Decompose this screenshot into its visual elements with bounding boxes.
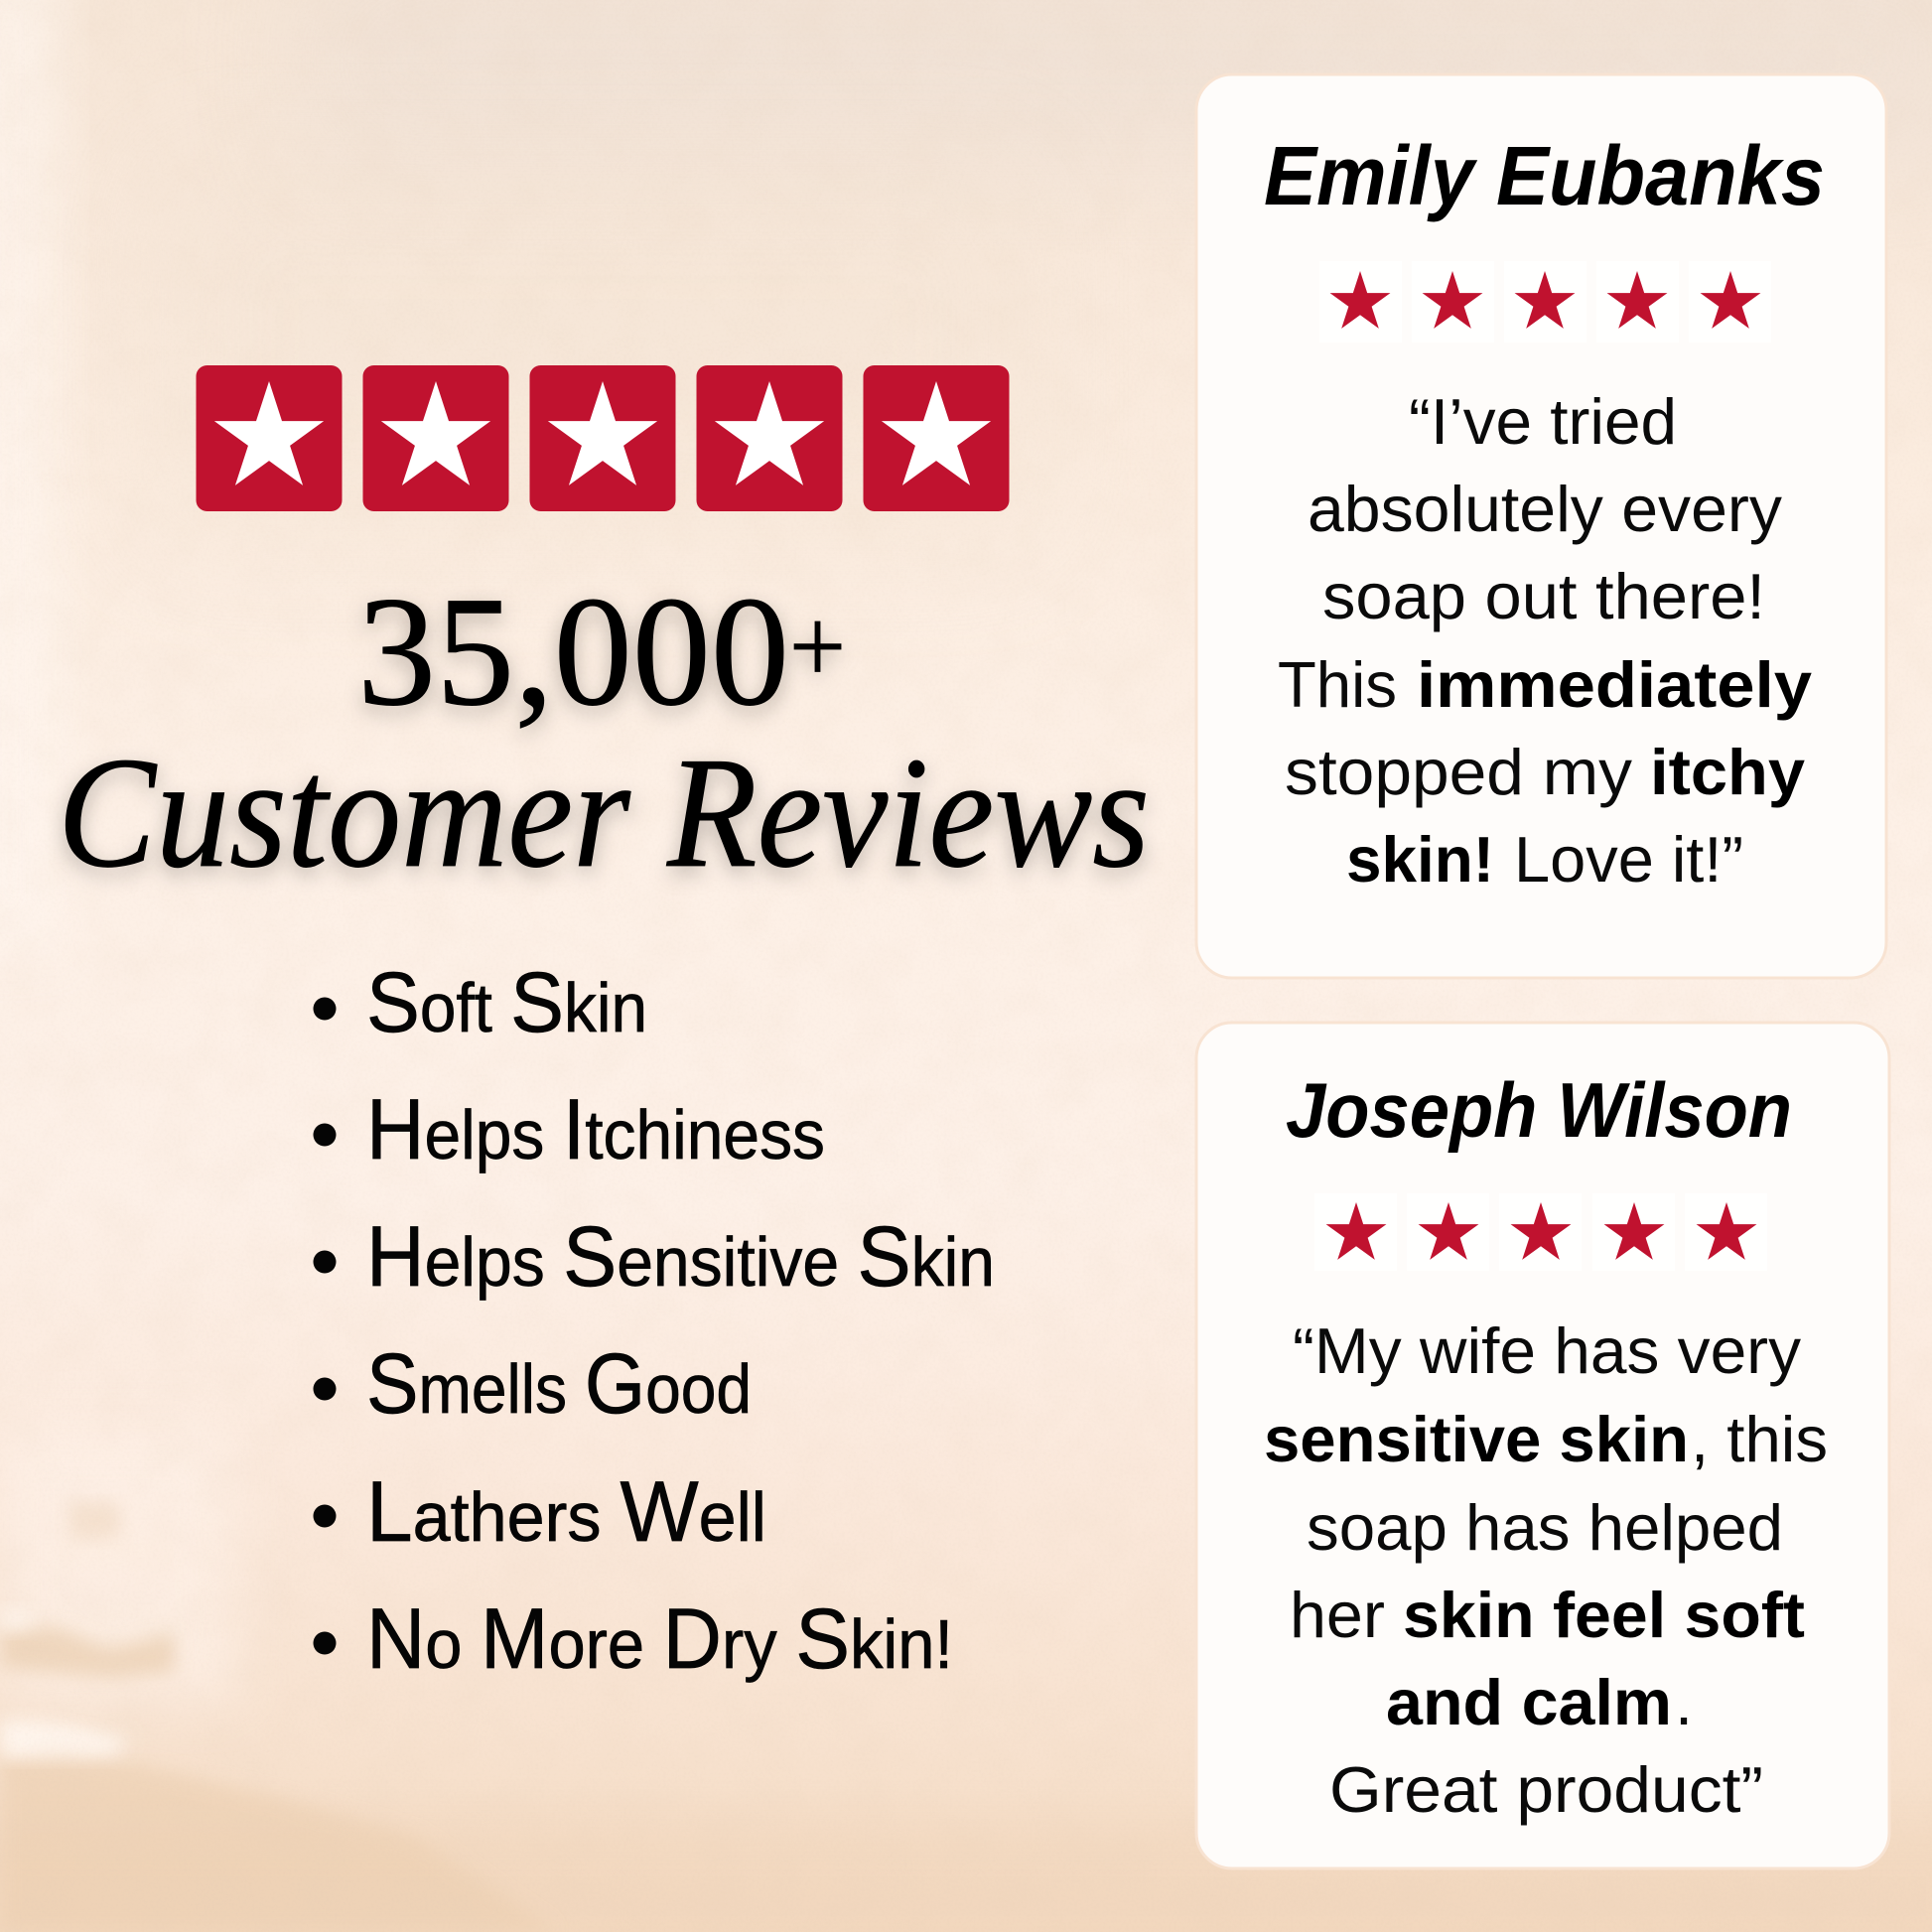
review quote text: “My wife has very — [1293, 1314, 1802, 1387]
panel: review by Emily Eubanks — [1196, 74, 1886, 978]
review quote text: Great product” — [1329, 1753, 1763, 1826]
headline: 35,000+ Customer Reviews: + — [789, 588, 846, 706]
benefits bullet list: No More Dry Skin! — [366, 1591, 953, 1687]
five red stars on white tiles — [1314, 1193, 1767, 1271]
review quote text: immediately — [1417, 648, 1812, 721]
review quote text: sensitive skin — [1264, 1403, 1689, 1475]
benefits bullet list: Helps Sensitive Skin — [366, 1209, 995, 1305]
review quote text: skin! — [1346, 823, 1494, 896]
review quote text: her — [1290, 1579, 1385, 1651]
review quote text: , this — [1691, 1403, 1828, 1475]
review quote text: “I’ve tried — [1409, 385, 1677, 458]
review quote text: . — [1675, 1666, 1693, 1738]
review quote text: skin feel soft — [1403, 1579, 1805, 1651]
review quote text: stopped my — [1285, 736, 1633, 808]
review quote text: This — [1278, 648, 1397, 721]
review quote text: absolutely every — [1308, 473, 1783, 545]
benefits bullet list: Soft Skin — [366, 955, 647, 1050]
reviewer name: Emily Eubanks: Emily Eubanks — [1264, 129, 1825, 222]
benefits bullet list: Smells Good — [366, 1336, 752, 1432]
review quote text: soap has helped — [1307, 1491, 1783, 1564]
benefits bullet list — [314, 955, 995, 1687]
benefits bullet list: Lathers Well — [366, 1464, 766, 1560]
review quote text — [1264, 1314, 1828, 1826]
review quote text: soap out there! — [1322, 560, 1765, 632]
benefits bullet list: Helps Itchiness — [366, 1082, 825, 1177]
review quote text: and calm — [1386, 1666, 1672, 1738]
review quote text: itchy — [1650, 736, 1805, 808]
review quote text: Love it!” — [1514, 823, 1743, 896]
reviewer name: Joseph Wilson: Joseph Wilson — [1286, 1066, 1792, 1154]
panel: review by Joseph Wilson — [1196, 1023, 1889, 1868]
headline: 35,000+ Customer Reviews — [58, 565, 1150, 900]
review quote text — [1278, 385, 1812, 896]
five red rating squares with white stars — [197, 365, 1009, 511]
headline: 35,000+ Customer Reviews: Customer Reviews — [58, 724, 1150, 900]
five red stars on white tiles — [1319, 261, 1771, 343]
headline: 35,000+ Customer Reviews: 35,000 — [357, 565, 789, 739]
